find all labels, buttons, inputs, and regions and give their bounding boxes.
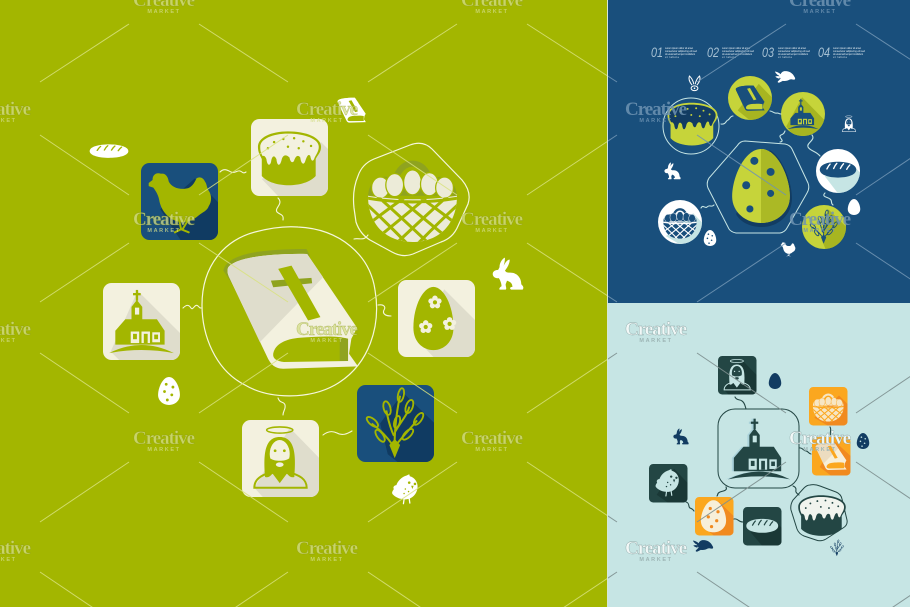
step 02: Lorem ipsum dolor sit amet xyxy=(722,47,750,50)
icon: hopping rabbit xyxy=(775,71,795,83)
tile: church xyxy=(103,283,181,361)
step 02: ut labore xyxy=(722,56,737,59)
icon: bunny head xyxy=(689,76,700,91)
watermarks: blue panel xyxy=(625,0,851,234)
icon: small hen xyxy=(781,242,795,256)
watermarks: green panel: Creative xyxy=(461,428,523,449)
basket outline xyxy=(354,143,469,256)
connectors xyxy=(701,111,833,208)
circle: church xyxy=(781,92,825,136)
step 03: 03 xyxy=(762,44,774,60)
panel: light background xyxy=(608,304,910,607)
circle: bread xyxy=(816,149,860,193)
watermarks: light panel: MARKET xyxy=(803,447,837,453)
tile: willow branch xyxy=(357,385,435,463)
icon: rabbit xyxy=(664,162,681,179)
watermarks: green panel: MARKET xyxy=(475,9,509,15)
step 03: Lorem ipsum dolor sit amet xyxy=(778,47,806,50)
watermarks: light panel xyxy=(625,319,851,563)
watermarks: blue panel: Creative xyxy=(789,209,851,230)
step 03: do eiusmod tempor incididunt xyxy=(778,53,808,56)
icon: bread xyxy=(90,144,128,158)
tile: Easter cake xyxy=(251,119,329,197)
watermarks: green panel: Creative xyxy=(296,538,358,559)
icon: small Jesus xyxy=(842,116,856,132)
icon: small egg xyxy=(158,377,180,405)
watermarks: green panel: MARKET xyxy=(147,447,181,453)
step 01: Lorem ipsum dolor sit amet xyxy=(665,47,693,50)
step 01: ut labore xyxy=(665,56,680,59)
step 04 xyxy=(818,44,866,60)
tile: orange egg xyxy=(695,497,734,536)
watermarks: light panel: Creative xyxy=(789,428,851,449)
watermarks: green panel: MARKET xyxy=(475,447,509,453)
step 01: consectetur adipiscing elit sed xyxy=(665,50,698,53)
connectors xyxy=(686,397,831,522)
icon: central church xyxy=(726,419,790,479)
circle: bible xyxy=(728,76,772,120)
cake hexagon outline xyxy=(791,485,847,541)
watermarks: green panel: Creative xyxy=(296,319,358,340)
panel: green background xyxy=(0,0,607,607)
watermarks: green panel: MARKET xyxy=(147,228,181,234)
circle: willow xyxy=(802,205,846,249)
icon: chick xyxy=(392,474,418,504)
step 04: Lorem ipsum dolor sit amet xyxy=(833,47,861,50)
watermarks: green panel: MARKET xyxy=(475,228,509,234)
icon: navy willow xyxy=(830,540,844,556)
icon: navy dotted egg xyxy=(857,433,869,449)
step 04: 04 xyxy=(818,44,830,60)
step 01 xyxy=(651,44,698,60)
panel: blue background xyxy=(608,0,910,303)
panel: green main diagram xyxy=(90,97,523,504)
icon: central bible xyxy=(223,249,358,369)
connectors xyxy=(183,170,391,435)
icon: Easter cake xyxy=(798,495,846,536)
central hexagon outline xyxy=(707,141,809,233)
watermarks: green panel: Creative xyxy=(296,99,358,120)
step 03 xyxy=(762,44,811,60)
circle: basket xyxy=(658,200,702,244)
tile: bible xyxy=(812,437,851,476)
watermarks: blue panel: MARKET xyxy=(803,228,837,234)
step 01: do eiusmod tempor incididunt xyxy=(665,53,695,56)
watermarks: blue panel: MARKET xyxy=(803,9,837,15)
step 02: 02 xyxy=(707,44,719,60)
watermarks: light panel: Creative xyxy=(625,319,687,340)
icon: egg basket xyxy=(355,164,470,249)
icon: navy hopping rabbit xyxy=(693,540,713,552)
circle outline: Easter cake xyxy=(663,98,719,154)
watermarks: green panel: MARKET xyxy=(147,9,181,15)
icon: navy rabbit xyxy=(673,428,689,444)
central rounded outline xyxy=(718,409,799,488)
step 04: ut labore xyxy=(833,56,848,59)
icon: striped egg xyxy=(848,199,860,215)
watermarks: blue panel: MARKET xyxy=(639,118,673,124)
watermarks: light panel: Creative xyxy=(625,538,687,559)
step 02: consectetur adipiscing elit sed xyxy=(722,50,755,53)
step 02 xyxy=(707,44,755,60)
watermarks: light panel: MARKET xyxy=(639,338,673,344)
watermarks: light panel: MARKET xyxy=(639,557,673,563)
watermarks: green panel xyxy=(0,0,523,563)
step 01: 01 xyxy=(651,44,663,60)
tile: decorated egg xyxy=(398,280,476,358)
tile: chick xyxy=(649,464,688,503)
step 03: ut labore xyxy=(778,56,793,59)
tile: bread xyxy=(743,507,782,546)
icon: small bible xyxy=(337,97,366,123)
watermarks: green panel: MARKET xyxy=(310,557,344,563)
icon: central egg xyxy=(732,148,792,227)
tile: Jesus xyxy=(718,356,757,395)
watermarks: green panel: MARKET xyxy=(310,338,344,344)
watermarks: green panel: MARKET xyxy=(310,118,344,124)
central book outline xyxy=(202,227,377,396)
watermarks: blue panel: Creative xyxy=(625,99,687,120)
step labels 01-04 xyxy=(651,44,866,60)
panel: light diagram xyxy=(649,356,869,556)
step 03: consectetur adipiscing elit sed xyxy=(778,50,811,53)
icon: rabbit xyxy=(493,258,523,290)
watermarks: green panel: Creative xyxy=(461,209,523,230)
icon: navy egg xyxy=(769,373,781,389)
step 04: do eiusmod tempor incididunt xyxy=(833,53,863,56)
tile: hen xyxy=(141,163,219,241)
watermarks: green panel: Creative xyxy=(133,209,195,230)
tile: Jesus xyxy=(242,420,320,498)
tile: basket xyxy=(808,387,848,426)
icon: dotted egg xyxy=(704,230,716,246)
watermarks: green panel: Creative xyxy=(133,428,195,449)
panel: blue diagram xyxy=(651,44,866,256)
step 02: do eiusmod tempor incididunt xyxy=(722,53,752,56)
step 04: consectetur adipiscing elit sed xyxy=(833,50,866,53)
